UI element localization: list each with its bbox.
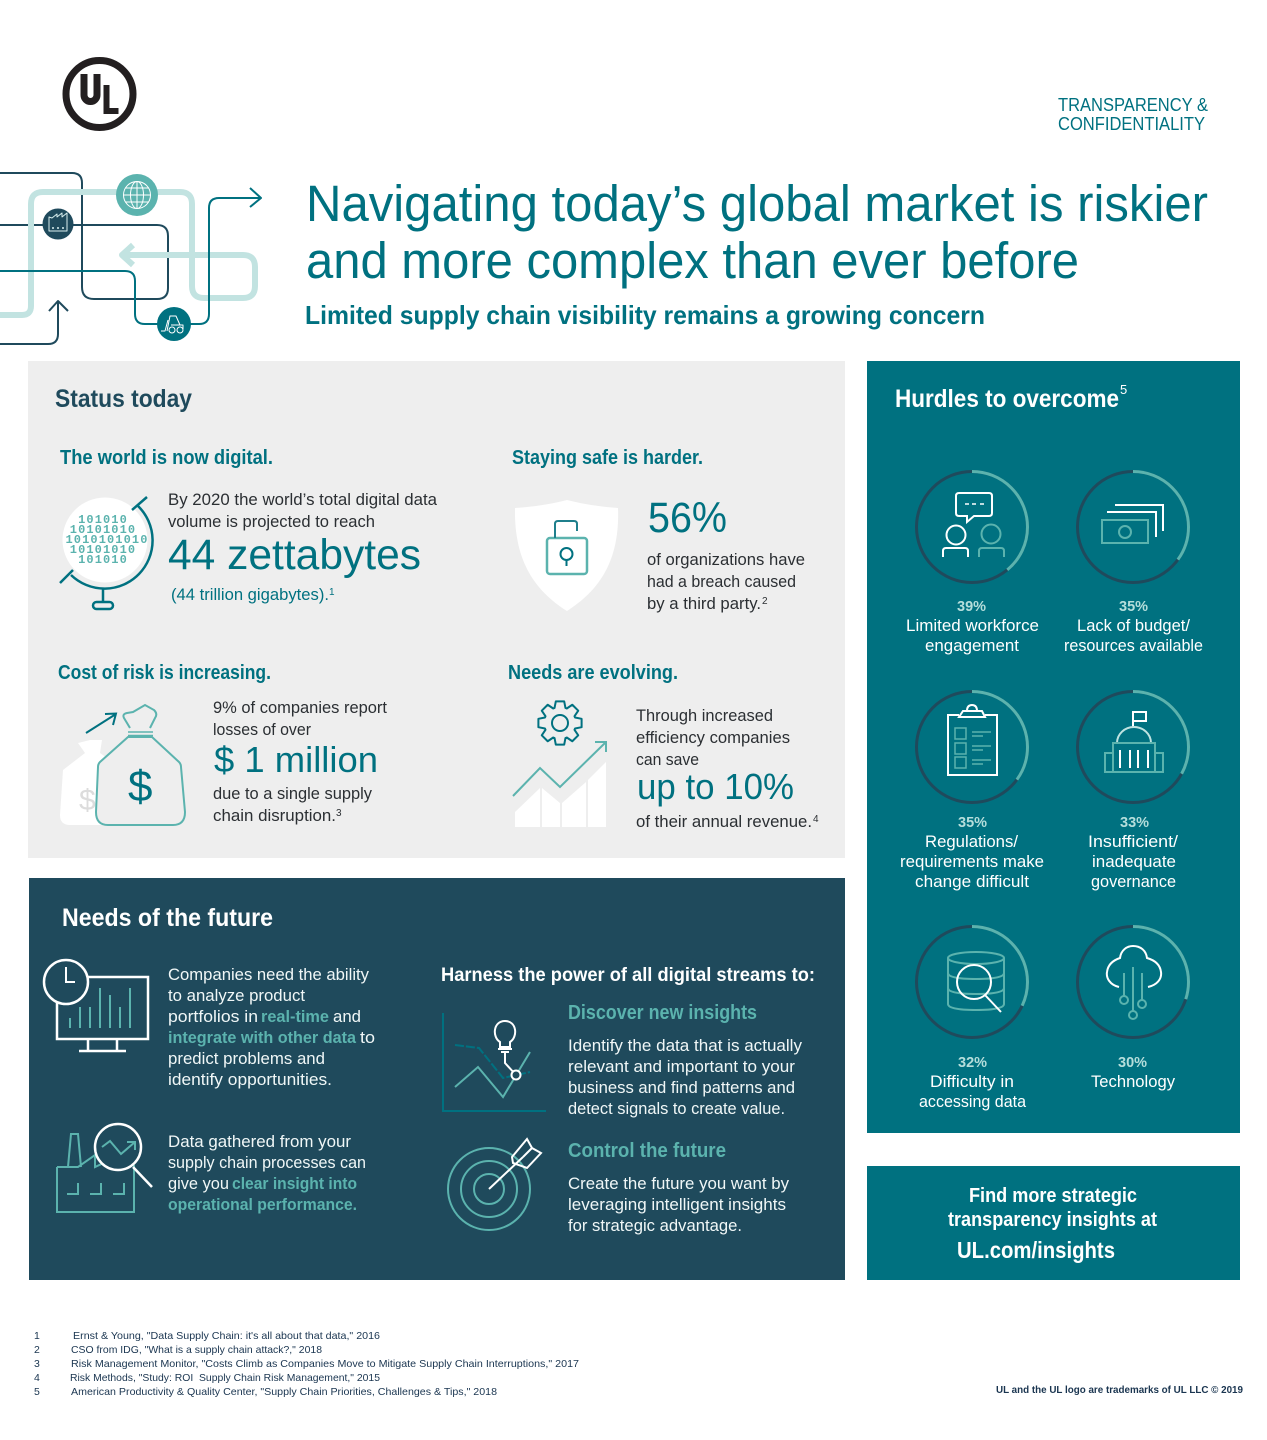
- text: breach statistic: 2: [762, 596, 768, 607]
- hurdle: accessing data: accessing data: [919, 1093, 1027, 1111]
- footnotes: 2: [34, 1344, 40, 1356]
- hurdle: governance: inadequate: [1092, 853, 1176, 871]
- trademark notice: UL and the UL logo are trademarks of UL LLC © 2019: [996, 1384, 1243, 1396]
- text: control the future: Create the future you want by: [568, 1175, 790, 1193]
- text: losses statistic: due to a single supply: [213, 785, 373, 803]
- panel: call to action: Find more strategic: [969, 1185, 1137, 1207]
- footnotes: Ernst & Young, "Data Supply Chain: it's all about that data," 2016: [73, 1330, 380, 1342]
- text: data volume: 44 zettabytes: [168, 531, 421, 579]
- subtitle: Limited supply chain visibility remains a growing concern: [305, 300, 985, 330]
- title: [306, 175, 1208, 289]
- text: losses statistic: $ 1 million: [214, 739, 378, 780]
- text: discover new insights: detect signals to create value.: [568, 1100, 785, 1118]
- text: analyze portfolios: portfolios in: [168, 1008, 258, 1026]
- text: analyze portfolios: to analyze product: [168, 987, 305, 1005]
- heading: status today: Status today: [55, 385, 192, 413]
- block: needs are evolving: [508, 662, 819, 831]
- text: savings statistic: 4: [813, 814, 819, 825]
- icon: binary globe: 10101010: [70, 523, 136, 537]
- panel: status today: [28, 361, 845, 858]
- hurdle: accessing data: Difficulty in: [930, 1073, 1014, 1091]
- hurdle: accessing data: 32%: [958, 1055, 987, 1071]
- text: losses statistic: 3: [336, 808, 342, 819]
- icon: binary globe: 101010: [78, 553, 128, 567]
- text: savings statistic: of their annual revenue.: [636, 813, 812, 831]
- text: savings statistic: Through increased: [636, 707, 773, 725]
- text: analyze portfolios: real-time: [261, 1008, 329, 1026]
- hurdle: limited workforce engagement: Limited workforce: [906, 617, 1039, 635]
- panel: hurdles to overcome: [867, 361, 1240, 1133]
- text: operational insight: give you: [168, 1175, 229, 1193]
- text: breach statistic: 56%: [648, 494, 727, 542]
- text: analyze portfolios: to: [360, 1029, 375, 1047]
- text: savings statistic: [636, 707, 819, 831]
- category label: CONFIDENTIALITY: [1058, 114, 1205, 134]
- icon: globe: [116, 174, 158, 216]
- category label: TRANSPARENCY &: [1058, 95, 1208, 115]
- hurdle: limited workforce engagement: 39%: [957, 599, 986, 615]
- text: analyze portfolios: predict problems and: [168, 1050, 325, 1068]
- panel: call to action: UL.com/insights: [957, 1237, 1115, 1263]
- heading: Cost of risk is increasing.: [58, 662, 271, 684]
- icon: insight chart with bulb: [443, 1013, 546, 1111]
- hurdle: lack of budget: [1064, 472, 1203, 655]
- logo: UL: [66, 60, 133, 128]
- icon: money bags: $: [128, 762, 152, 811]
- icon: money bags: [60, 705, 185, 825]
- text: operational insight: [168, 1133, 366, 1214]
- footnotes: 1: [34, 1330, 40, 1342]
- text: discover new insights: Discover new insights: [568, 1002, 757, 1024]
- text: operational insight: clear insight into: [232, 1175, 357, 1193]
- hurdle: limited workforce engagement: [906, 472, 1039, 655]
- text: operational insight: operational performance.: [168, 1196, 357, 1214]
- text: control the future: Control the future: [568, 1140, 726, 1162]
- panel: call to action: [867, 1166, 1240, 1280]
- hurdle: regulations: Regulations/: [925, 833, 1018, 851]
- text: data volume: By 2020 the world’s total digital data: [168, 491, 438, 509]
- hurdle: lack of budget: resources available: [1064, 637, 1203, 655]
- hurdle: lack of budget: 35%: [1119, 599, 1148, 615]
- footnotes: [34, 1330, 579, 1398]
- heading: The world is now digital.: [60, 447, 273, 469]
- icon: binary globe: 10101010: [70, 543, 136, 557]
- hurdle: regulations: change difficult: [915, 873, 1029, 891]
- hurdle: technology: 30%: [1118, 1055, 1147, 1071]
- hurdle: regulations: [900, 692, 1044, 891]
- footnotes: CSO from IDG, "What is a supply chain attack?," 2018: [71, 1344, 322, 1356]
- text: savings statistic: efficiency companies: [636, 729, 790, 747]
- text: losses statistic: [213, 699, 387, 825]
- hurdle: governance: Insufficient/: [1088, 833, 1178, 851]
- block: cost of risk: [58, 662, 387, 825]
- footnotes: 5: [34, 1386, 40, 1398]
- text: control the future: for strategic advantage.: [568, 1217, 742, 1235]
- panel: needs of the future: [29, 878, 845, 1280]
- text: analyze portfolios: and: [333, 1008, 361, 1026]
- text: data volume: volume is projected to reach: [168, 513, 375, 531]
- hurdle: technology: [1078, 926, 1188, 1091]
- icon: money bags: $: [79, 784, 96, 817]
- hurdle: regulations: requirements make: [900, 853, 1044, 871]
- footnotes: Risk Management Monitor, "Costs Climb as Companies Move to Mitigate Supply Chain Interruptions," 2017: [71, 1358, 579, 1370]
- text: operational insight: Data gathered from your: [168, 1133, 352, 1151]
- footnotes: 4: [34, 1372, 40, 1384]
- category label: [1058, 95, 1208, 134]
- text: losses statistic: chain disruption.: [213, 807, 336, 825]
- icon: shield and lock: [515, 500, 618, 611]
- title: and more complex than ever before: [306, 232, 1079, 289]
- text: savings statistic: can save: [636, 751, 699, 769]
- text: control the future: [568, 1140, 790, 1235]
- hurdle: governance: governance: [1091, 873, 1176, 891]
- text: savings statistic: up to 10%: [637, 766, 794, 807]
- icon: target and arrow: [448, 1139, 541, 1230]
- icon: factory with magnifier: [57, 1124, 152, 1212]
- footnotes: 3: [34, 1358, 40, 1370]
- text: analyze portfolios: integrate with other data: [168, 1029, 357, 1047]
- hurdle: governance: 33%: [1120, 815, 1149, 831]
- text: losses statistic: 9% of companies report: [213, 699, 387, 717]
- text: analyze portfolios: Companies need the ability: [168, 966, 370, 984]
- text: breach statistic: had a breach caused: [647, 573, 796, 591]
- icon: monitor with clock: [44, 960, 148, 1051]
- text: analyze portfolios: identify opportunities.: [168, 1071, 332, 1089]
- heading: Staying safe is harder.: [512, 447, 703, 469]
- text: data volume: [168, 491, 438, 604]
- block: staying safe is harder: [512, 447, 805, 613]
- hurdle: governance: [1078, 692, 1188, 891]
- panel: call to action: transparency insights at: [948, 1209, 1157, 1231]
- icon: binary globe: 1010101010: [65, 533, 149, 547]
- heading: Needs are evolving.: [508, 662, 678, 684]
- icon: factory: [42, 208, 74, 240]
- text: operational insight: supply chain processes can: [168, 1154, 366, 1172]
- footnotes: Risk Methods, "Study: ROI Supply Chain Risk Management," 2015: [70, 1372, 380, 1384]
- block: the world is now digital: [60, 447, 438, 609]
- icon: binary globe: [60, 497, 153, 609]
- illustration: supply chain network: [0, 173, 261, 344]
- text: discover new insights: Identify the data that is actually: [568, 1037, 803, 1055]
- title: Navigating today’s global market is riskier: [306, 175, 1208, 232]
- hurdle: accessing data: [916, 926, 1028, 1111]
- hurdle: lack of budget: Lack of budget/: [1077, 617, 1190, 635]
- text: control the future: leveraging intelligent insights: [568, 1196, 786, 1214]
- icon: binary globe: 101010: [78, 513, 128, 527]
- icon: forklift: [157, 307, 191, 341]
- text: analyze portfolios: [168, 966, 375, 1089]
- text: data volume: (44 trillion gigabytes).: [171, 586, 329, 604]
- hurdle: regulations: 35%: [958, 815, 987, 831]
- text: breach statistic: [647, 494, 805, 613]
- heading: needs of the future: Needs of the future: [62, 904, 273, 932]
- text: discover new insights: relevant and important to your: [568, 1058, 796, 1076]
- hurdle: technology: Technology: [1091, 1073, 1176, 1091]
- text: data volume: 1: [329, 587, 335, 598]
- footnotes: American Productivity & Quality Center, "Supply Chain Priorities, Challenges & Tips," 2018: [71, 1386, 497, 1398]
- text: losses statistic: losses of over: [213, 721, 311, 739]
- icon: gear and growth chart: [513, 701, 606, 827]
- text: breach statistic: by a third party.: [647, 595, 761, 613]
- heading: harness the power: Harness the power of all digital streams to:: [441, 965, 815, 986]
- heading: hurdles to overcome: Hurdles to overcome: [895, 385, 1119, 413]
- text: breach statistic: of organizations have: [647, 551, 805, 569]
- hurdle: limited workforce engagement: engagement: [925, 637, 1019, 655]
- heading: hurdles to overcome: 5: [1120, 382, 1127, 397]
- text: discover new insights: business and find patterns and: [568, 1079, 795, 1097]
- text: discover new insights: [568, 1002, 803, 1118]
